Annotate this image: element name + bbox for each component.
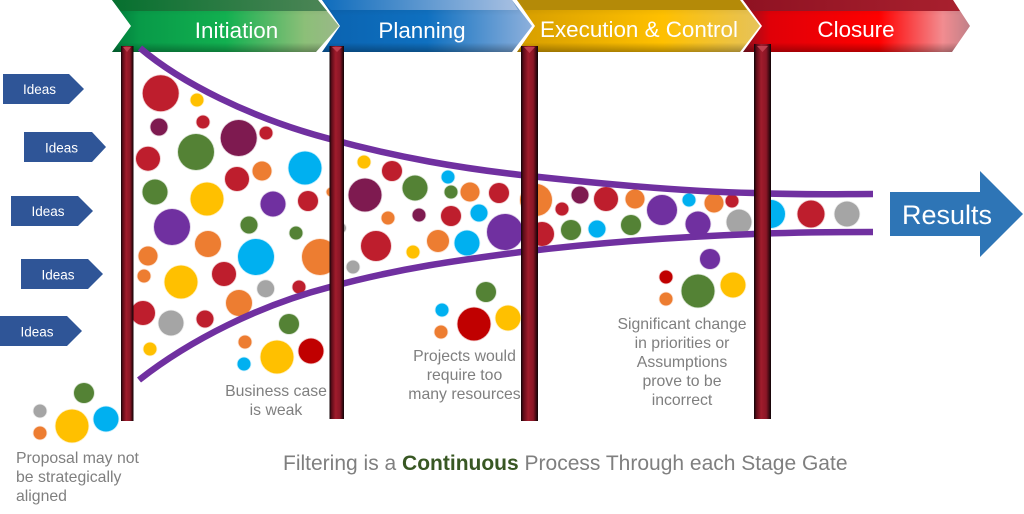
idea arrow 4: Ideas: [41, 268, 75, 282]
label: significant change in priorities: incorrect: [652, 392, 713, 409]
phase chevron: Initiation: [112, 0, 339, 52]
phase chevron: Initiation: Initiation: [195, 18, 278, 43]
label: proposal may not be strategically aligned: Proposal may not: [16, 450, 140, 467]
phase chevron: Execution and Control: [517, 0, 760, 52]
idea arrow 3: [11, 196, 93, 226]
rejected group: changed priorities: [660, 249, 746, 308]
stage gate bar 2: [330, 46, 344, 419]
phase chevron: Planning: [322, 0, 532, 52]
rejected group: resources: [434, 282, 520, 340]
stage gate bar 1: [121, 46, 134, 421]
idea arrow 3: Ideas: [31, 204, 65, 219]
idea arrow 5: [0, 316, 82, 346]
stage gate bar 3: [521, 46, 538, 421]
funnel: upper curve: [140, 48, 873, 194]
label: significant change in priorities: prove to be: [642, 373, 722, 390]
idea arrow 4: [21, 259, 103, 289]
label: business case is weak: Business case: [225, 383, 327, 400]
label: projects would require too many resources: Projects would: [413, 348, 516, 365]
label: proposal may not be strategically aligned: be strategically: [16, 469, 121, 486]
idea arrow 2: [24, 132, 106, 162]
idea arrow 2: Ideas: [45, 140, 78, 156]
results arrow: [890, 171, 1023, 257]
caption: continuous filtering: Filtering is a Continuous Process Through each Stage Gate: [283, 452, 848, 475]
ideas inside the funnel: [131, 75, 860, 356]
results arrow: Results: [902, 200, 992, 230]
label: projects would require too many resources: require too: [427, 367, 502, 384]
funnel: lower curve: [139, 232, 873, 380]
label: significant change in priorities: Significant change: [617, 316, 747, 333]
label: significant change in priorities: Assumptions: [637, 354, 727, 371]
phase chevron: Closure: Closure: [817, 17, 895, 42]
label: proposal may not be strategically aligned: aligned: [16, 488, 67, 505]
idea arrow 1: Ideas: [23, 82, 56, 97]
rejected group: business case: [238, 314, 324, 374]
idea arrows: [0, 74, 106, 346]
label: significant change in priorities: in priorities or: [635, 335, 729, 352]
rejected group: strategic alignment: [34, 383, 118, 442]
idea arrow 5: Ideas: [20, 324, 54, 340]
phase chevron: Planning: Planning: [378, 18, 466, 43]
phase chevron: Closure: [743, 0, 970, 52]
stage gate bar 4: [754, 44, 771, 419]
phase chevron: Execution and Control: Execution & Control: [540, 17, 738, 42]
label: business case is weak: is weak: [250, 402, 302, 419]
idea arrow 1: [3, 74, 84, 104]
label: projects would require too many resources: many resources: [408, 386, 521, 403]
